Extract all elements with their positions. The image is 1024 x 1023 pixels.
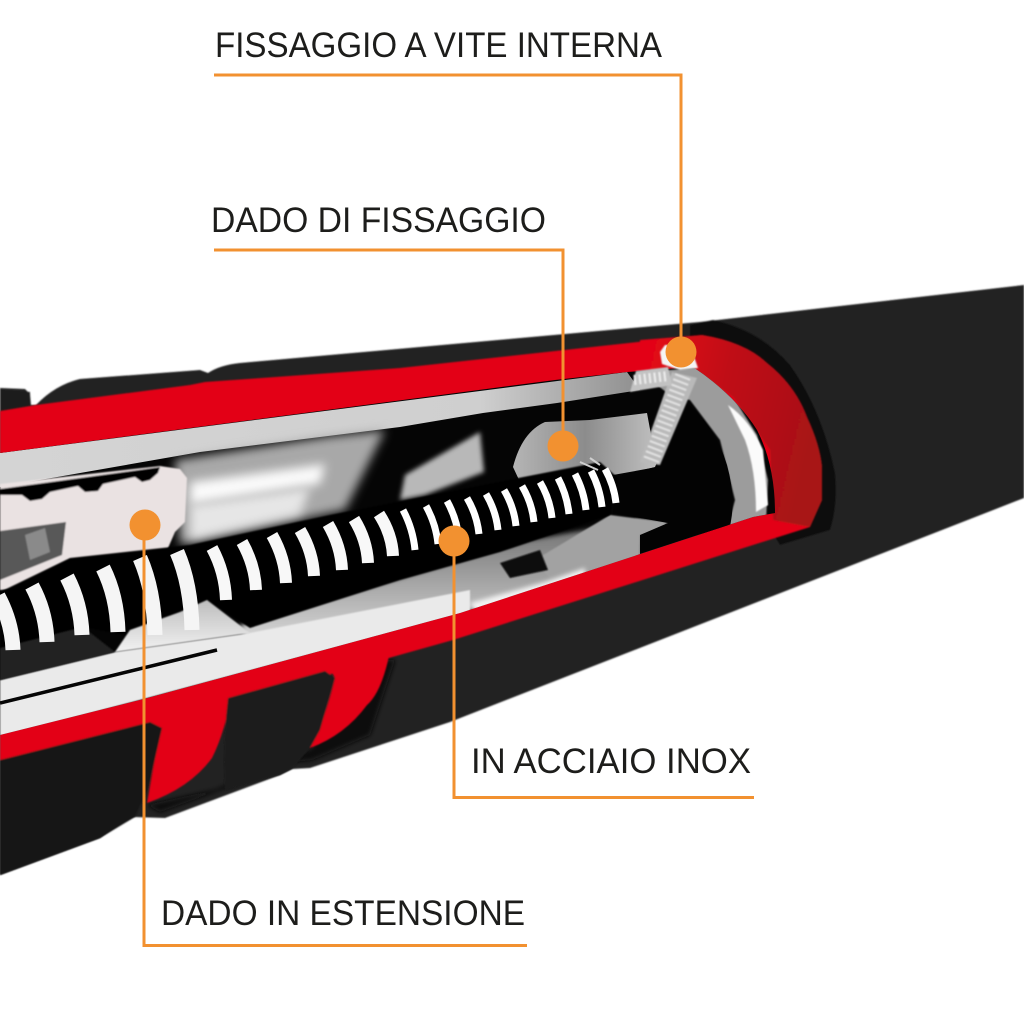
marker: vite interna bbox=[666, 336, 696, 368]
label: dado di fissaggio: DADO DI FISSAGGIO bbox=[211, 201, 546, 240]
label: in acciaio inox: IN ACCIAIO INOX bbox=[471, 742, 751, 781]
marker: dado di fissaggio bbox=[548, 430, 578, 462]
lead screw bbox=[0, 458, 618, 680]
left plate lower bbox=[0, 590, 470, 737]
label: fissaggio a vite interna: FISSAGGIO A VITE INTERNA bbox=[215, 26, 663, 65]
dark dome rim bbox=[690, 320, 836, 545]
extension nut block bbox=[0, 466, 187, 590]
steel interior of the tube bbox=[0, 368, 775, 735]
dark rubber block two bbox=[224, 671, 335, 790]
dark insert triangle bbox=[0, 627, 115, 680]
nut black groove bbox=[0, 467, 160, 501]
retaining ring bbox=[658, 368, 769, 526]
white wedge under screw bbox=[115, 600, 250, 652]
black dome cap bbox=[635, 450, 732, 554]
actuator outer black body bbox=[0, 285, 1024, 875]
dark rubber block one bbox=[0, 722, 162, 875]
white thread crests, medium pitch bbox=[212, 514, 393, 600]
bracket tab bbox=[630, 367, 672, 392]
leader line: dado in estensione bbox=[144, 525, 527, 946]
bolt thread bbox=[650, 376, 683, 463]
red lobe left bbox=[147, 690, 232, 803]
dark grey insert bbox=[0, 522, 66, 580]
lower nut bbox=[542, 514, 666, 583]
label: dado in estensione: DADO IN ESTENSIONE bbox=[161, 894, 525, 933]
darker red dome bbox=[640, 335, 822, 527]
white thread crests, fine pitch bbox=[403, 469, 616, 550]
red lobe right bbox=[310, 640, 392, 748]
marker: acciaio inox bbox=[438, 526, 470, 556]
leader line: fissaggio a vite interna bbox=[214, 75, 681, 352]
dark underside shading bbox=[147, 660, 395, 812]
upper steel band bbox=[0, 372, 640, 487]
white edge by lower sleeve bbox=[470, 566, 588, 610]
internal fixing screw bbox=[630, 345, 698, 465]
grey disc of fixing nut bbox=[513, 413, 657, 482]
red inner sleeve bbox=[0, 335, 822, 875]
square shadow bbox=[500, 550, 548, 578]
screw black core bbox=[0, 462, 618, 650]
bright steel barrel bbox=[175, 430, 385, 545]
bolt head bbox=[660, 345, 698, 370]
white thread crests, large pitch bbox=[0, 552, 192, 650]
leader line: in acciaio inox bbox=[454, 541, 754, 798]
marker: dado in estensione bbox=[130, 510, 160, 540]
leader line: dado di fissaggio bbox=[214, 250, 563, 446]
black slot line bbox=[0, 650, 217, 703]
ring highlight bbox=[728, 405, 768, 512]
thread detail near nut bbox=[580, 458, 600, 470]
lower steel surface bbox=[240, 520, 705, 650]
bolt shank bbox=[640, 372, 697, 465]
grey reflection bbox=[400, 432, 484, 500]
